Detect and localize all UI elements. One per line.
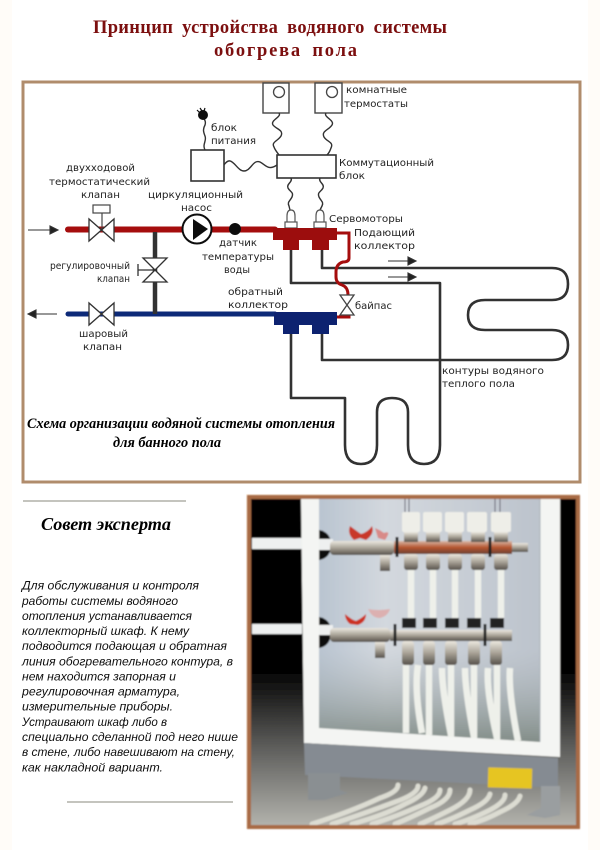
connecting pipes left (252, 538, 333, 635)
diagram labels: байпас (355, 301, 392, 312)
cabinet openings (319, 530, 331, 648)
advice text: Устраивают шкаф либо в (21, 717, 167, 729)
advice text: Для обслуживания и контроля (20, 580, 199, 592)
cabinet interior (319, 499, 540, 745)
panel frame (23, 82, 580, 482)
advice text: регулировочная арматура, (21, 686, 180, 698)
diagram labels: регулировочный (50, 261, 130, 272)
diagram labels: термостаты (344, 99, 408, 110)
advice text: отопления устанавливается (22, 611, 192, 623)
diagram labels: клапан (81, 190, 120, 201)
diagram labels: температуры (202, 252, 274, 263)
arrows (28, 226, 416, 318)
diagram labels: клапан (83, 342, 122, 353)
warning label (488, 767, 532, 789)
cabinet frame (301, 499, 560, 757)
title (93, 18, 447, 61)
diagram labels: комнатные (346, 85, 407, 96)
room thermostats (263, 83, 342, 113)
photo background (250, 497, 578, 827)
diagram labels: контуры водяного (442, 366, 544, 377)
wiring (203, 113, 332, 210)
ball valve (89, 303, 114, 325)
advice text (20, 580, 238, 774)
diagram labels: блок (211, 123, 237, 134)
diagram labels: блок (339, 171, 365, 182)
panel: heating system diagram (23, 82, 580, 482)
mounting feet (308, 773, 348, 800)
return collector (274, 312, 337, 334)
diagram labels: шаровый (79, 329, 128, 340)
lower manifold (330, 618, 512, 665)
icon: power plug (197, 108, 208, 120)
diagram labels: двухходовой (66, 163, 135, 174)
red supply pipe (68, 226, 275, 232)
floor pipes (312, 785, 520, 824)
bypass pipe (335, 233, 349, 317)
diagram caption (27, 416, 335, 451)
icon: circulation pump (182, 214, 212, 244)
cabinet plinth (304, 743, 558, 788)
diagram labels: термостатический (49, 177, 150, 188)
diagram labels: коллектор (354, 241, 415, 252)
servo actuators (402, 512, 511, 532)
diagram labels: теплого пола (442, 379, 515, 390)
diagram labels: циркуляционный (148, 190, 243, 201)
diagram labels: Коммутационный (339, 158, 434, 169)
divider bottom (67, 801, 233, 803)
upper manifold (330, 532, 528, 571)
servomotors (285, 210, 326, 228)
floor heating loops (291, 250, 568, 464)
water temperature sensor (229, 223, 241, 235)
diagram labels: обратный (228, 287, 283, 298)
panel: photo of collector cabinet (246, 494, 580, 829)
advice text: измерительные приборы. (22, 702, 173, 714)
diagram labels: Сервомоторы (329, 214, 403, 225)
advice text: специально сделанной под него нише (22, 732, 238, 744)
interior lower shading (319, 650, 540, 745)
advice text: нем находится запорная и (22, 672, 177, 684)
diagram labels: насос (181, 203, 212, 214)
title: Принцип устройства водяного системы (93, 18, 447, 38)
diagram labels (49, 85, 544, 390)
vertical white pipes (406, 568, 518, 741)
diagram caption: для банного пола (113, 435, 221, 451)
diagram labels: воды (224, 265, 250, 276)
diagram labels: коллектор (228, 300, 288, 311)
bridge pipe and balancing valve (138, 232, 167, 314)
title: обогрева пола (214, 41, 357, 61)
diagram labels: клапан (97, 274, 130, 285)
panel: expert advice (20, 501, 238, 802)
diagram caption: Схема организации водяной системы отопления (27, 416, 335, 432)
photo frame (249, 497, 578, 827)
red valve handles (345, 526, 390, 625)
power supply box (191, 150, 224, 181)
advice text: коллекторный шкаф. К нему (22, 626, 190, 638)
diagram labels: питания (211, 136, 256, 147)
switching block (277, 155, 336, 178)
diagram labels: Подающий (354, 228, 415, 239)
two-way thermostatic valve (89, 205, 114, 241)
actuator wires (405, 499, 500, 512)
diagram labels: датчик (219, 238, 257, 249)
advice text: в стене, либо навешивают на стену, (22, 747, 235, 759)
advice heading: Совет эксперта (41, 514, 171, 534)
divider top (23, 500, 186, 502)
advice text: линия обогревательного контура, в (21, 656, 233, 668)
blue return pipe (68, 312, 275, 316)
advice text: работы системы водяного (21, 596, 179, 608)
bypass valve (340, 295, 354, 315)
advice text: подводится подающая и обратная (22, 641, 227, 653)
advice text: как накладной вариант. (22, 762, 163, 774)
supply collector (273, 228, 337, 250)
